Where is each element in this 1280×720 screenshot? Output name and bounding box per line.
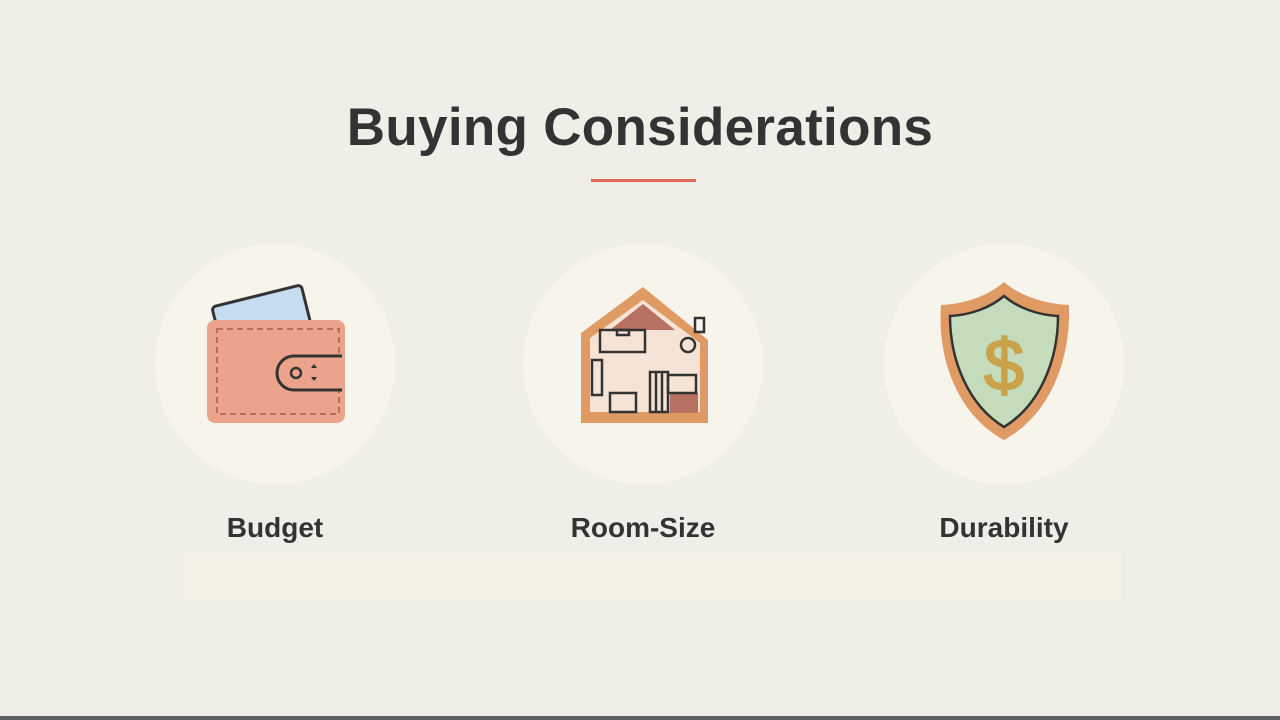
icon: house floor plan [581, 287, 708, 423]
icon: wallet [207, 284, 345, 423]
title underline [591, 179, 696, 182]
label: Durability: Durability [939, 512, 1069, 543]
panel: room-size [571, 287, 715, 543]
icon: shield with dollar: $ [984, 326, 1024, 406]
panel: budget [207, 284, 345, 543]
icon: shield with dollar [940, 282, 1070, 440]
title: Buying Considerations [347, 98, 933, 157]
panel: durability [939, 282, 1070, 543]
bottom bar [0, 716, 1280, 720]
label: Budget: Budget [227, 512, 323, 543]
label: Room-Size: Room-Size [571, 512, 715, 543]
caption box (empty) [187, 554, 1122, 600]
